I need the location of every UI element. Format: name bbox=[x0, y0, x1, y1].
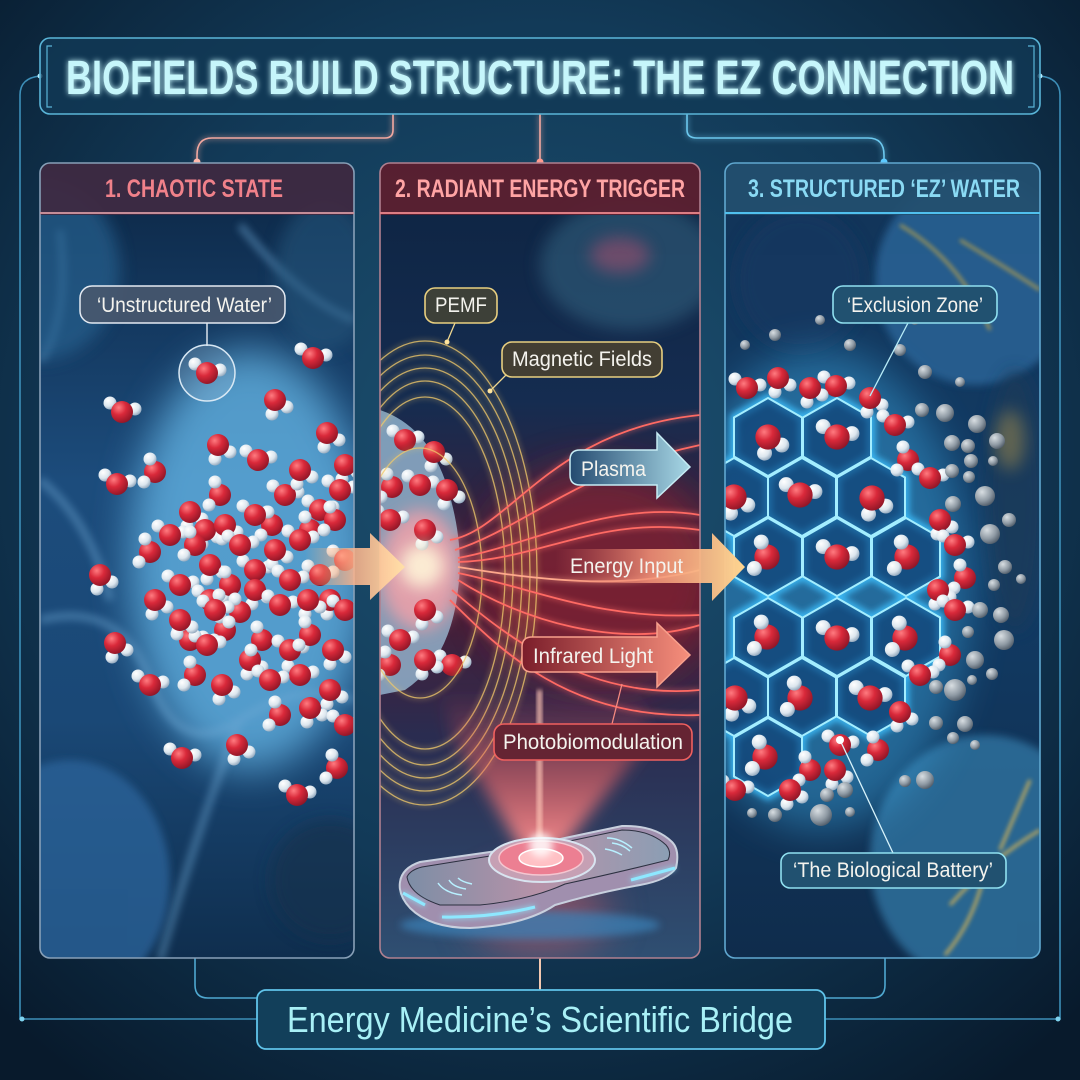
hexagonal lattice bbox=[700, 398, 940, 796]
callout: unstructured water bbox=[80, 286, 285, 401]
callout: exclusion zone bbox=[833, 286, 997, 396]
arrow: energy input bbox=[555, 533, 745, 601]
panel 3: structured EZ water bbox=[724, 162, 1041, 959]
callout: magnetic fields: Magnetic Fields bbox=[512, 348, 652, 371]
beam bbox=[440, 690, 650, 850]
callout: PEMF bbox=[425, 288, 497, 344]
arrow: plasma: Plasma bbox=[581, 458, 646, 481]
callout: photobiomodulation bbox=[494, 684, 692, 760]
energy flow lines bbox=[450, 415, 700, 715]
heading 1: 1. CHAOTIC STATE bbox=[105, 175, 283, 203]
arrow: infrared light bbox=[522, 623, 690, 687]
panel 1: chaotic state bbox=[39, 162, 355, 959]
molecules and droplets around lattice bbox=[716, 315, 1026, 826]
footer banner bbox=[257, 990, 825, 1049]
arrow: chaos to trigger bbox=[305, 533, 405, 600]
cluster bbox=[372, 410, 472, 695]
footer text: Energy Medicine’s Scientific Bridge bbox=[287, 999, 793, 1040]
arrow: energy input: Energy Input bbox=[570, 555, 683, 578]
callout: photobiomodulation: Photobiomodulation bbox=[503, 731, 683, 754]
title banner bbox=[40, 38, 1040, 114]
arrow: plasma bbox=[570, 433, 690, 498]
callout: PEMF: PEMF bbox=[435, 294, 487, 317]
callout: biological battery bbox=[781, 736, 1006, 888]
callout: exclusion zone: ‘Exclusion Zone’ bbox=[847, 294, 983, 317]
arrow: infrared light: Infrared Light bbox=[533, 645, 653, 668]
callout: biological battery: ‘The Biological Battery’ bbox=[793, 859, 993, 882]
callout: magnetic fields bbox=[488, 342, 662, 394]
water molecules bbox=[89, 342, 364, 806]
device bbox=[400, 826, 677, 939]
panel 2: radiant energy trigger bbox=[379, 162, 701, 959]
callout: unstructured water: ‘Unstructured Water’ bbox=[97, 294, 272, 317]
magnetic field arcs bbox=[380, 336, 541, 810]
heading 2: 2. RADIANT ENERGY TRIGGER bbox=[395, 175, 685, 203]
